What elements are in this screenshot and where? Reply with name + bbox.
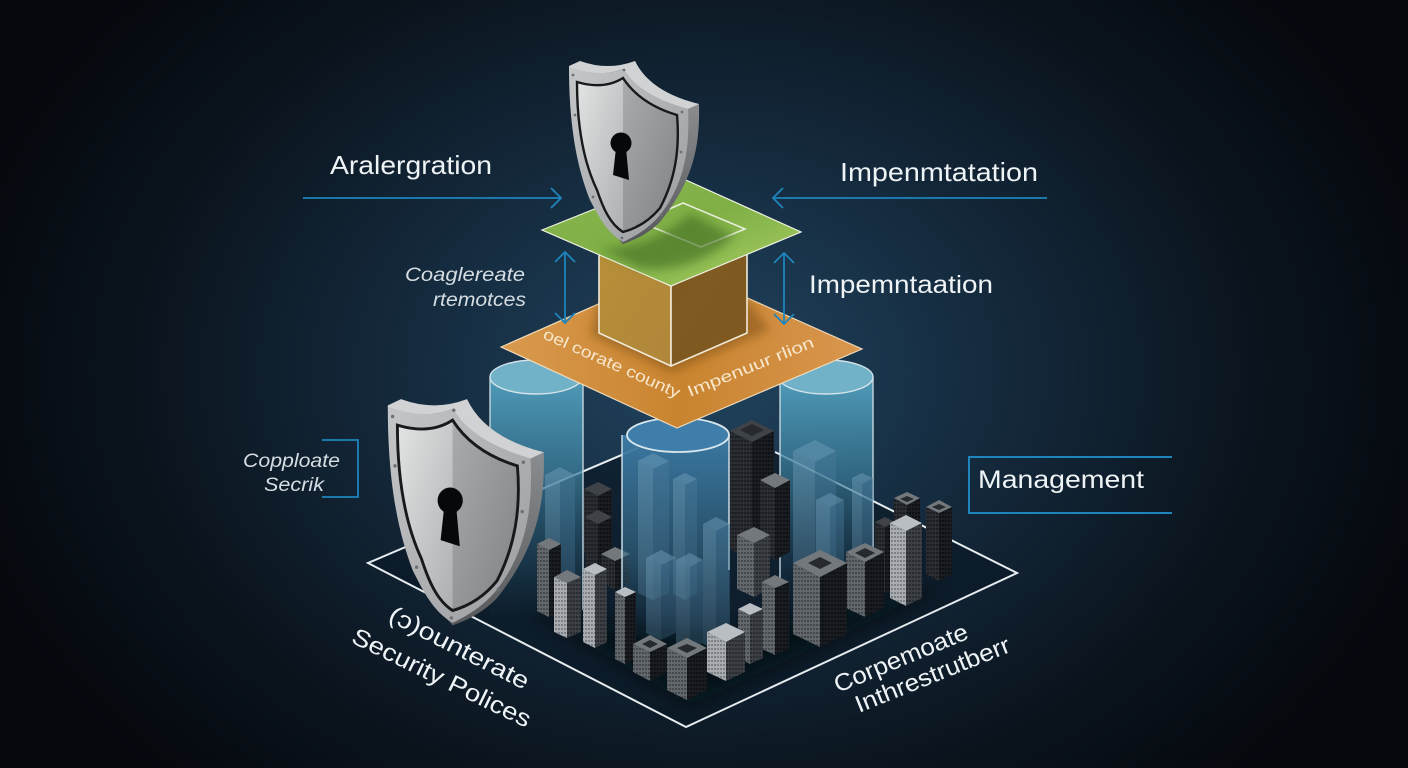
left cylinder [490,360,583,620]
city: faded towers inside cylinders [545,440,873,610]
shield shadow [600,214,735,269]
middle cylinder [622,418,729,640]
ground label: policies: Security Polices [347,623,535,733]
box shadow on platform [590,300,770,372]
ground label: infrastructure: Inthrestrutberr [851,632,1014,719]
callout: corporate security: Copploate [243,451,340,472]
right cylinder [779,360,873,610]
ground label: policies [347,601,535,733]
callout: management: Management [978,466,1144,494]
middle-left label: Coaglereate [405,265,525,286]
right double arrow [774,253,794,324]
ground label: policies: (ↄ)ounterate [384,601,534,695]
green platform [542,176,801,286]
top-right label: Impenmtatation [840,157,1038,187]
top shield [569,61,699,244]
callout: corporate security: Secrik [264,475,326,496]
bottom shield [388,399,544,625]
orange platform [501,268,862,428]
middle-left label: rtemotces [433,290,527,311]
platform label left: oel corate county [540,326,682,402]
inner rectangle [640,203,745,247]
gold box [599,250,747,366]
callout: corporate security [243,440,358,497]
left double arrow [555,252,575,323]
top-left label: Aralergration [330,150,492,180]
platform label right: Impenuur rlion [685,334,817,401]
ground plane outline [368,448,1017,727]
city: front towers [537,515,922,700]
city: faded towers in middle cylinder [638,453,730,650]
callout: management [969,457,1172,513]
top-right arrow [773,188,1047,208]
ground label: infrastructure [830,619,1014,719]
city shadow [530,585,950,705]
middle-right label: Impemntaation [809,271,993,299]
ground label: infrastructure: Corpemoate [830,619,972,699]
middle-left label [405,265,527,311]
top-left arrow [303,188,561,208]
city: back dark towers [584,420,952,593]
